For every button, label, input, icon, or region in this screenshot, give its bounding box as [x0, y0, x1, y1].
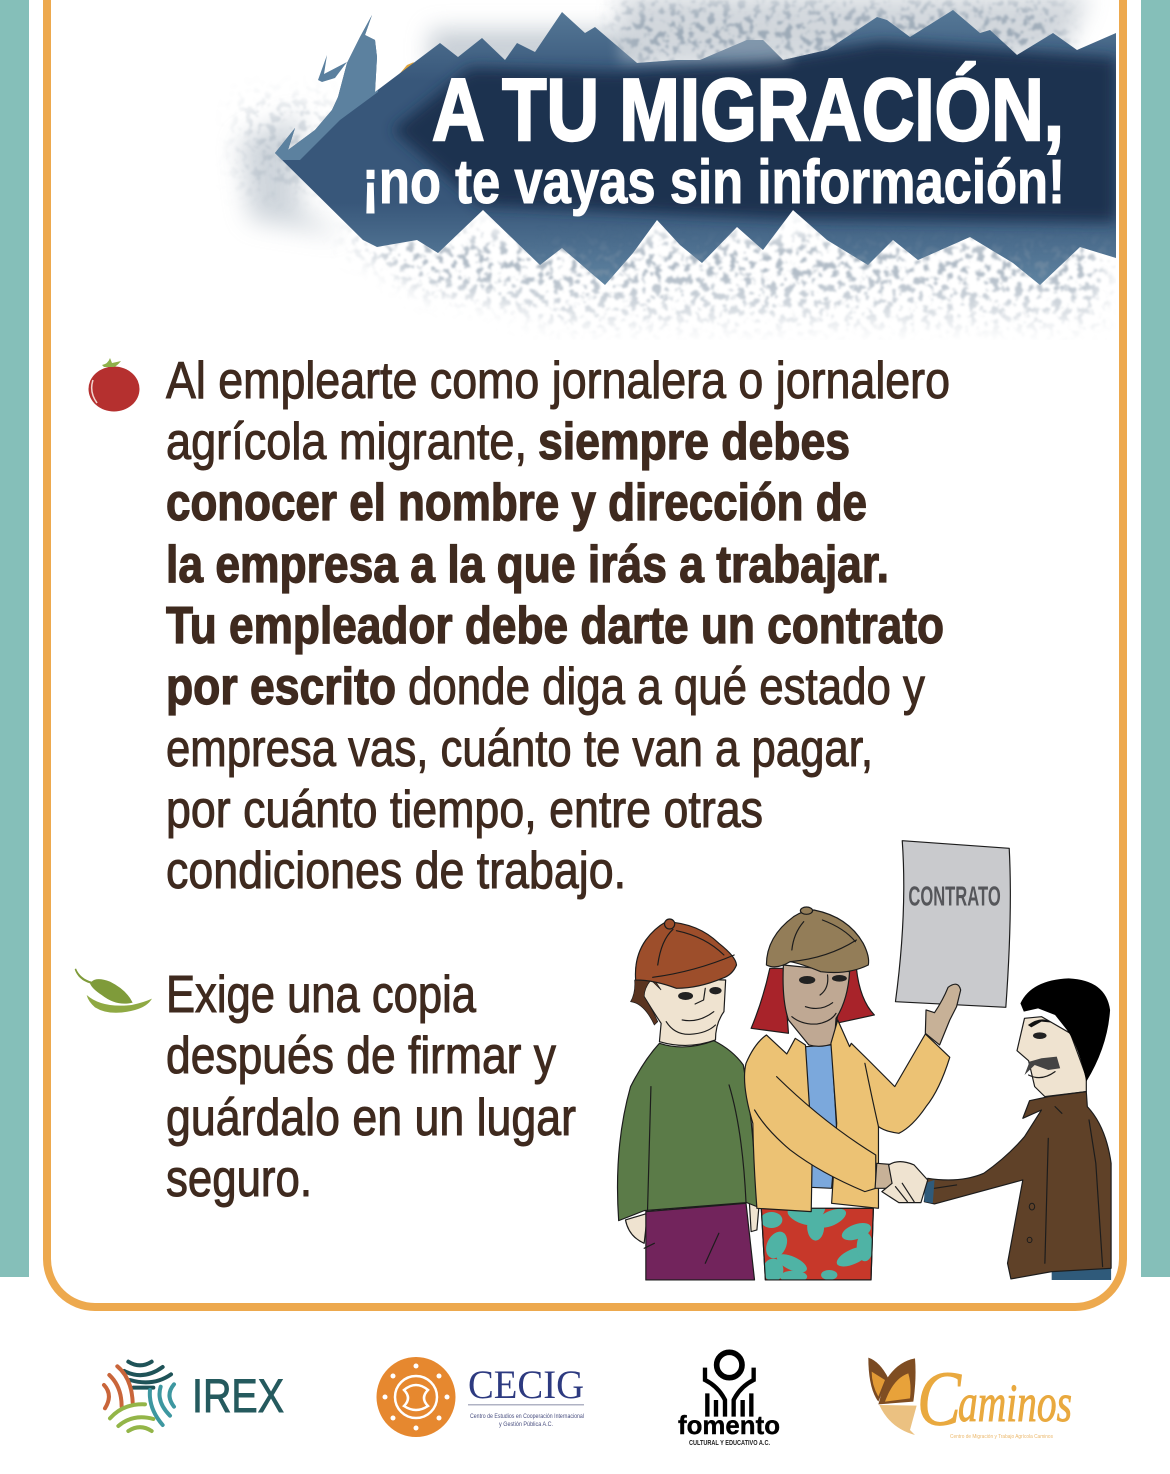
text block: contract information: conocer el nombre y dirección de	[166, 474, 867, 532]
text block: contract information: condiciones de trabajo.	[166, 842, 626, 900]
logo: Caminos: Centro de Migración y Trabajo Agrícola Caminos	[950, 1434, 1053, 1440]
worker in green sweater	[618, 919, 759, 1280]
text block: keep a copy: seguro.	[166, 1150, 312, 1208]
text block: contract information: empresa vas, cuánto te van a pagar,	[166, 720, 873, 778]
logo: CECIG: y Gestión Pública A.C.	[499, 1421, 553, 1428]
icon: tomato bullet	[88, 358, 140, 412]
logo: Caminos: aminos	[958, 1373, 1072, 1433]
logo: fomento: fomento	[678, 1410, 780, 1440]
logo: fomento	[678, 1352, 780, 1447]
logo: CECIG: Centro de Estudios en Cooperación Internacional	[470, 1413, 584, 1420]
banner: torn mountain title background	[240, 0, 1120, 322]
text block: contract information: por cuánto tiempo, entre otras	[166, 781, 763, 839]
text block: contract information: por escrito	[166, 658, 396, 716]
text block: contract information: agrícola migrante,	[166, 413, 527, 471]
text block: contract information	[166, 352, 950, 900]
logo: IREX	[104, 1362, 284, 1431]
text block: contract information: siempre debes	[538, 413, 850, 471]
contract sheet	[895, 841, 1010, 1007]
text block: keep a copy: Exige una copia	[166, 966, 476, 1024]
employer in brown jacket	[882, 978, 1111, 1280]
text block: contract information: Tu empleador debe darte un contrato	[166, 597, 944, 655]
icon: chili pepper bullet	[75, 968, 152, 1013]
logo: CECIG	[376, 1357, 584, 1437]
text block: keep a copy	[166, 966, 576, 1208]
logo: IREX: IREX	[192, 1369, 284, 1422]
text block: contract information: la empresa a la que irás a trabajar.	[166, 536, 889, 594]
text block: keep a copy: después de firmar y	[166, 1027, 556, 1085]
contract sheet: CONTRATO	[908, 880, 1001, 911]
teal side band: left	[0, 0, 29, 1277]
logo: fomento: CULTURAL Y EDUCATIVO A.C.	[689, 1440, 770, 1447]
text block: keep a copy: guárdalo en un lugar	[166, 1089, 576, 1147]
worker in yellow jacket	[744, 907, 961, 1283]
logo: CECIG: CECIG	[468, 1362, 584, 1407]
text block: contract information: Al emplearte como jornalera o jornalero	[166, 352, 950, 410]
logo: Caminos	[868, 1355, 1072, 1442]
logo: Caminos: C	[917, 1355, 962, 1442]
illustration: workers shaking hands with employer and contract	[618, 841, 1111, 1283]
text block: contract information: donde diga a qué estado y	[408, 658, 925, 716]
teal side band: right	[1141, 0, 1170, 1277]
